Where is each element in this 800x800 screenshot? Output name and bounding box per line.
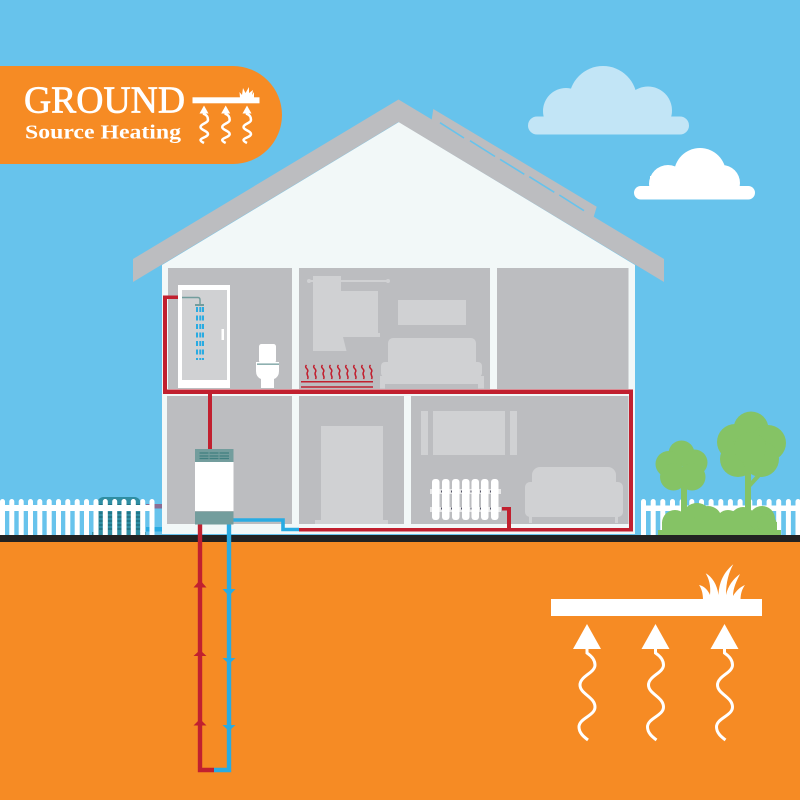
- radiator: [430, 479, 501, 520]
- tree: small: [656, 440, 708, 525]
- title badge: [0, 66, 282, 164]
- ground bar: [551, 599, 762, 616]
- wavy heat lines: [579, 649, 732, 740]
- bushes: [658, 503, 781, 536]
- roof: [133, 100, 664, 282]
- borehole pipe loop: [194, 524, 236, 770]
- ground: black strip: [0, 535, 800, 542]
- cloud: small white: [634, 148, 755, 203]
- grass: [699, 564, 745, 600]
- icon: small ground heat: [192, 87, 260, 143]
- fence: right: [641, 502, 800, 535]
- wall unit: [421, 411, 517, 455]
- ground heat diagram: [551, 564, 762, 740]
- toilet: [256, 344, 279, 388]
- fence: left: [0, 497, 163, 535]
- underfloor heating: [301, 365, 373, 387]
- heat pump boiler: [195, 449, 234, 524]
- outdoor heat pump unit: [92, 497, 146, 535]
- curtain and mirror: [307, 276, 390, 351]
- rooms: [167, 268, 628, 524]
- shower cabin: [178, 285, 230, 388]
- door: [315, 426, 388, 524]
- title: GROUND: GROUND: [24, 80, 185, 122]
- return pipe: blue: [232, 520, 299, 530]
- cloud: large pale: [528, 66, 689, 134]
- solar panels: [432, 109, 597, 218]
- arrows: flow up: [194, 580, 206, 726]
- ground: orange earth: [0, 542, 800, 800]
- subtitle: Source Heating: Source Heating: [25, 122, 181, 144]
- arrows: heat rising: [573, 624, 738, 649]
- sofa: [525, 467, 623, 523]
- wall picture: [398, 300, 466, 325]
- house: [133, 100, 664, 534]
- arrows: flow down: [222, 589, 236, 731]
- tree: large: [717, 412, 786, 525]
- house walls: [162, 122, 635, 534]
- heating pipes: red: [163, 296, 633, 532]
- bed: [380, 338, 484, 389]
